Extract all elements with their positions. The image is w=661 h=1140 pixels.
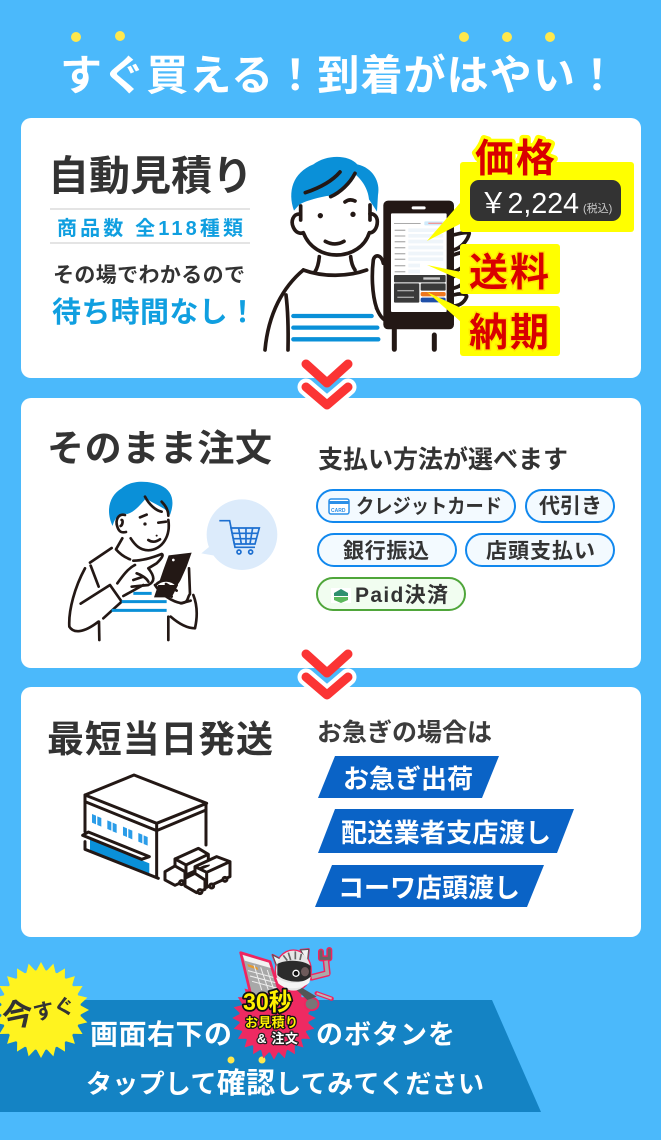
badge: right now: 今	[0, 995, 37, 1036]
callout: delivery date: 納期	[469, 312, 549, 355]
panel: automatic quote	[21, 118, 641, 378]
callout: price: 価格	[475, 138, 555, 181]
callout: price	[427, 138, 634, 241]
panel: same-day shipping	[21, 687, 641, 937]
badge: right now: すぐ	[31, 994, 77, 1025]
text: no waiting: 待ち時間なし！	[52, 296, 257, 329]
callout: delivery date	[427, 292, 560, 356]
burst text: 30秒	[243, 989, 292, 1016]
badge: right now	[0, 962, 89, 1058]
pill: bank transfer	[318, 534, 456, 566]
callout: price: (税込)	[583, 201, 612, 215]
illustration: man tapping phone	[69, 482, 277, 640]
panel: order as is	[21, 398, 641, 668]
heading: automatic quote: 自動見積り	[48, 153, 253, 199]
pill: credit card: CARD	[331, 508, 346, 514]
illustration: warehouse and trucks	[83, 775, 230, 894]
pointing hand	[117, 554, 163, 596]
text: urgent: お急ぎの場合は	[317, 719, 492, 747]
title: すぐ買える！到着がはやい！	[60, 52, 618, 99]
callout: price: ￥2,224	[479, 188, 579, 220]
pill: pay at store: 店頭支払い	[486, 540, 595, 563]
phone in hand	[154, 553, 192, 603]
calculator	[241, 953, 279, 998]
heading: same-day shipping: 最短当日発送	[47, 719, 273, 760]
arrow: chevrons between panels 1 and 2	[306, 364, 348, 405]
banner text line 2: タップして確認してみてください	[86, 1067, 484, 1100]
banner text line 1: 画面右下の	[90, 1019, 232, 1050]
option: rush shipping	[318, 756, 499, 798]
payment heading: 支払い方法が選べます	[318, 445, 568, 474]
option: carrier branch pickup	[318, 809, 574, 853]
arrow: chevrons between panels 2 and 3	[306, 654, 348, 695]
text: no waiting: その場でわかるので	[53, 264, 245, 287]
banner: call to action	[0, 1000, 541, 1112]
pill: cash on delivery: 代引き	[539, 495, 602, 518]
pill: bank transfer: 銀行振込	[343, 540, 429, 563]
30 seconds burst	[232, 976, 316, 1060]
callout: shipping fee	[427, 244, 560, 295]
option: store pickup	[315, 865, 544, 907]
option: carrier branch pickup: 配送業者支店渡し	[341, 818, 551, 848]
callout: shipping fee: 送料	[469, 252, 549, 295]
robot cat and calculator	[241, 949, 332, 1010]
banner text line 1: のボタンを	[316, 1020, 455, 1050]
option: rush shipping: お急ぎ出荷	[343, 764, 473, 794]
icon: quote button with robot cat	[232, 949, 332, 1060]
pill: credit card	[317, 490, 515, 522]
banner text line 1	[90, 1019, 455, 1050]
burst text: & 注文	[257, 1031, 298, 1046]
cat silhouette outline	[273, 949, 332, 1010]
text: no waiting	[52, 264, 257, 329]
pill: credit card: クレジットカード	[356, 495, 502, 518]
burst text: お見積り	[245, 1015, 298, 1030]
pill: Paid payment	[317, 578, 465, 610]
pill: cash on delivery	[526, 490, 614, 522]
illustration: man holding phone	[265, 157, 470, 350]
pill: Paid payment: Paid決済	[355, 584, 448, 607]
pill: pay at store	[466, 534, 614, 566]
speech bubble with cart	[201, 499, 277, 570]
phone	[383, 201, 454, 329]
option: store pickup: コーワ店頭渡し	[338, 873, 520, 903]
cat body	[273, 949, 332, 1009]
title	[60, 31, 618, 99]
product count tag: 商品数 全118種類	[57, 217, 243, 240]
burst text	[243, 989, 298, 1046]
heading: order as is: そのまま注文	[47, 428, 272, 469]
